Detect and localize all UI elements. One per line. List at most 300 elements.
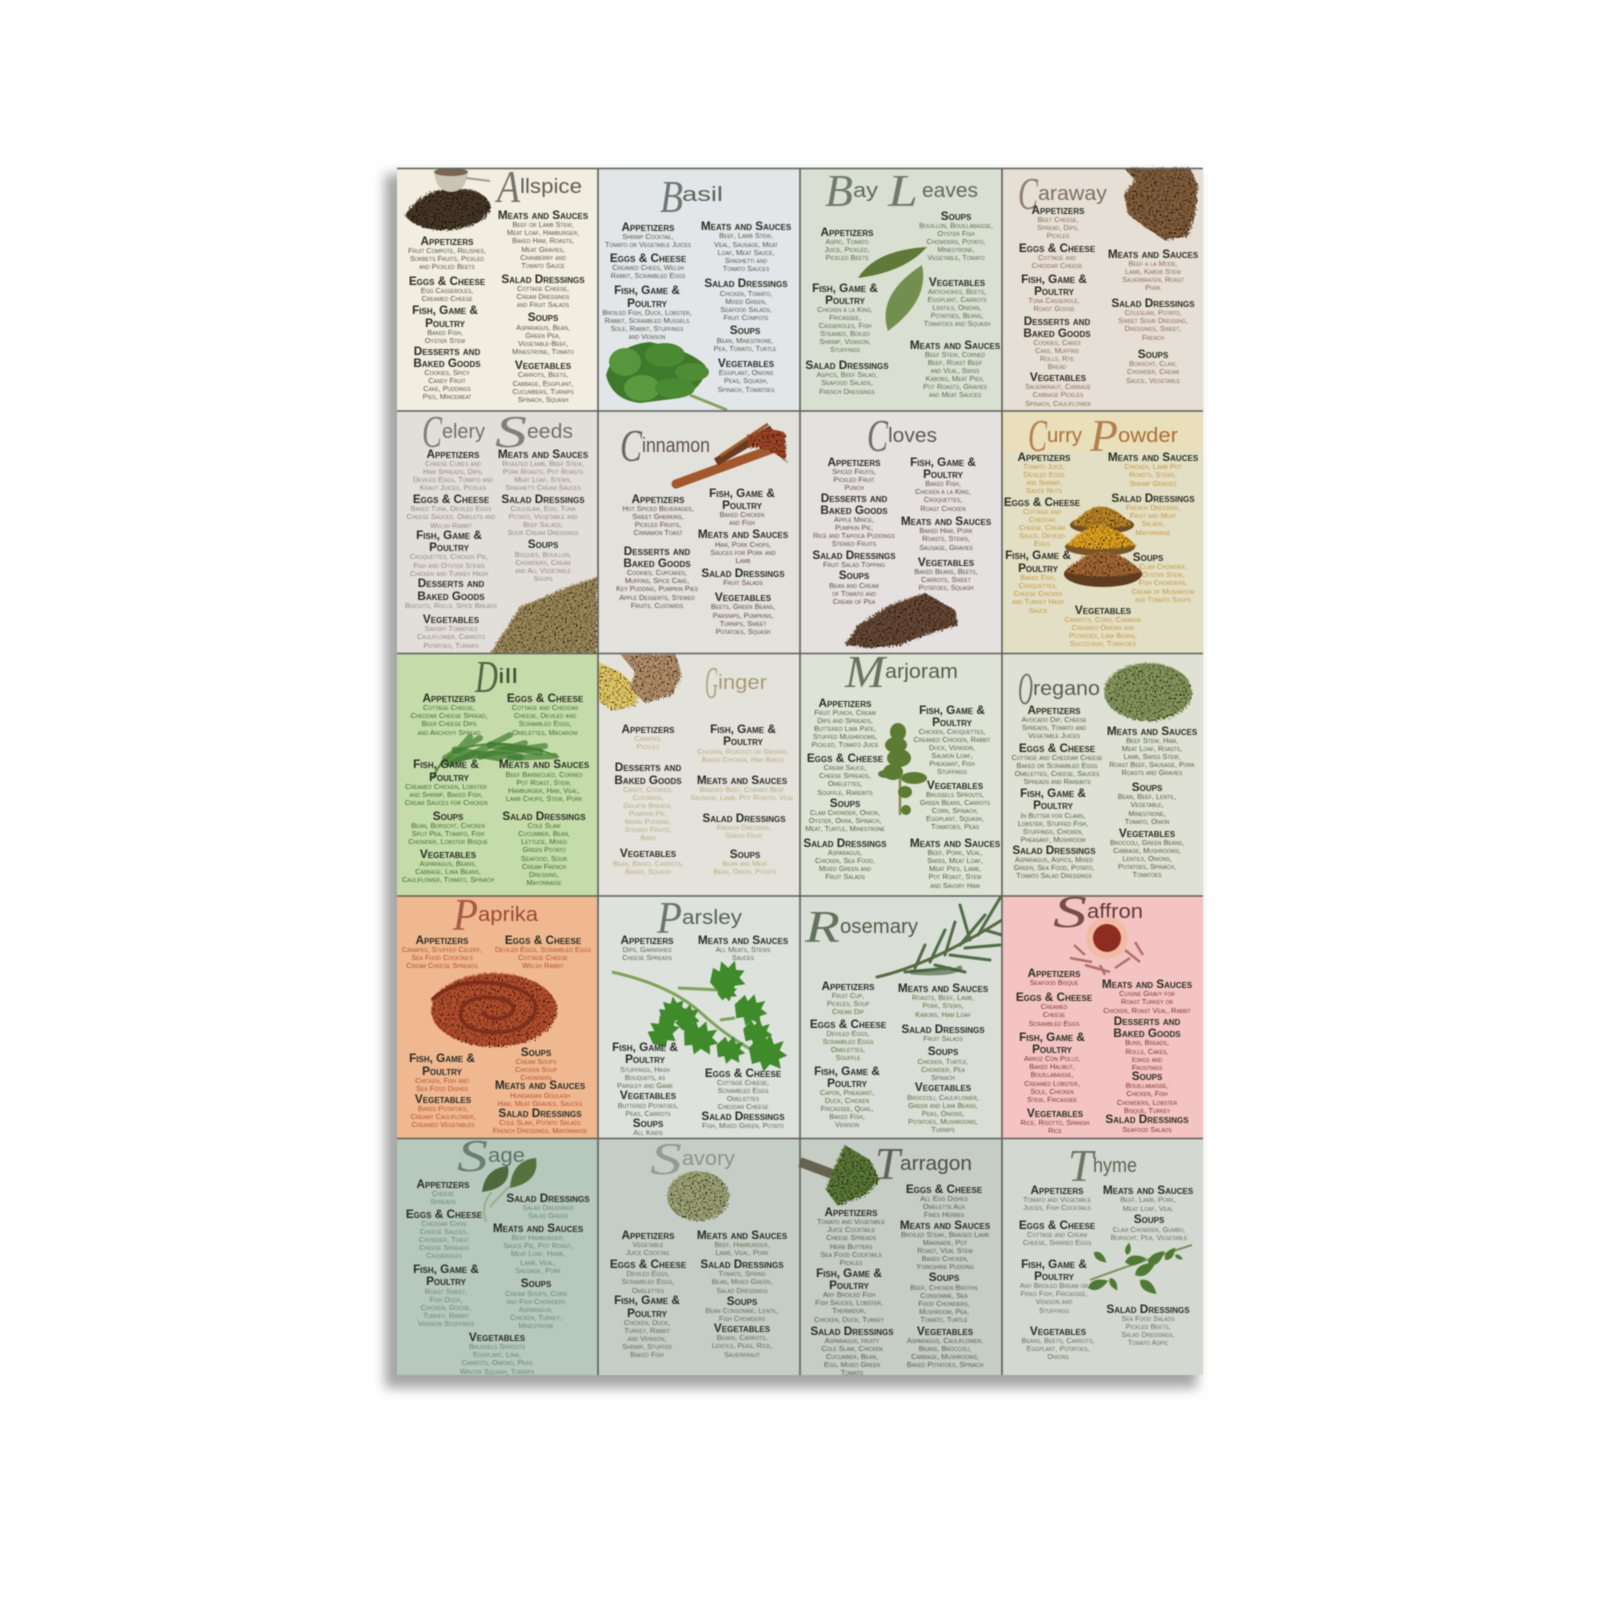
block: vegetables: Potatoes, Mushrooms, [908, 1117, 978, 1126]
block: fish game poultry: Poultry [825, 293, 866, 307]
block: eggs and cheese: Souffle, Rarebits [817, 788, 873, 797]
block: salad dressings [812, 548, 896, 569]
block: desserts: Baked Goods [1113, 1026, 1181, 1040]
block: vegetables: Peas, Squash, [724, 376, 768, 385]
block: salad dressings [704, 276, 788, 322]
block: fish game poultry: Venison and [1036, 1297, 1073, 1306]
block: desserts: Baked Goods [1023, 326, 1091, 340]
block: fish game poultry: and Fish [729, 518, 755, 527]
title: paprika: P [452, 889, 478, 940]
panel: celery seeds [397, 406, 598, 653]
block: salad dressings: Cole Slaw [528, 821, 561, 830]
block: appetizers: Canapes, Stuffed Celery, [402, 945, 482, 954]
block: eggs and cheese: Creamed Cheese [421, 294, 473, 303]
block: salad dressings: Salad Green [528, 1211, 568, 1220]
icon: bay leaves [858, 247, 927, 331]
block: soups: Bean, Onion, Potato [714, 867, 777, 876]
block: meats and sauces: Meats and Sauces [498, 447, 589, 461]
block: vegetables [1110, 826, 1184, 879]
block: appetizers: Cottage Cheese, [423, 703, 475, 712]
block: salad dressings: Seafood Salads, [720, 305, 772, 314]
block: soups: Chicken, Fish [1126, 1089, 1168, 1098]
block: meats and sauces: Meats and Sauces [1108, 247, 1199, 261]
block: vegetables: Beets, Green Beans, [711, 602, 775, 611]
block: appetizers [402, 933, 482, 970]
block: fish game poultry: Fish, Game & [1005, 548, 1071, 562]
block: fish game poultry: Fish and Oyster Stews [413, 561, 485, 570]
block: vegetables: Green Beans, Carrots [920, 798, 991, 807]
block: vegetables: Cabbage Pickles [1033, 390, 1084, 399]
block: desserts: Desserts and [615, 760, 681, 774]
block: salad dressings [493, 1106, 588, 1135]
block: fish game poultry: Poultry [827, 1076, 868, 1090]
block: soups: Oyster Stew, [1142, 570, 1184, 579]
block: meats and sauces [1108, 450, 1199, 488]
block: appetizers: Cream Dip [832, 1007, 865, 1016]
block: fish game poultry: Fish, Game & [1019, 1030, 1085, 1044]
block: appetizers: Appetizers [621, 933, 674, 947]
block: meats and sauces [498, 208, 589, 270]
block: meats and sauces: Meats and Sauces [898, 981, 989, 995]
panel: curry powder [1002, 410, 1203, 653]
block: salad dressings [506, 1191, 590, 1220]
block: eggs and cheese: Eggs & Cheese [406, 1207, 483, 1221]
block: desserts: Desserts and [414, 344, 480, 358]
block: fish game poultry: Fish, Game & [416, 528, 482, 542]
title: thyme [1068, 1140, 1137, 1191]
block: eggs and cheese: Welsh Rabbit [522, 961, 564, 970]
block: appetizers: Sorbets Fruits, Pickled [410, 254, 484, 263]
block: meats and sauces: Beef Stew, Corned [925, 350, 986, 359]
block: vegetables: Baked, Squash [625, 867, 671, 876]
block: appetizers: Beet Cheese, [1037, 215, 1079, 224]
block: fish game poultry: and Venison [629, 332, 666, 341]
block: eggs and cheese: Eggs & Cheese [807, 751, 884, 765]
block: appetizers: Cream Cheese Spreads [406, 961, 478, 970]
block: soups [910, 1270, 978, 1324]
block: appetizers: Appetizers [423, 691, 476, 705]
block: fish game poultry: Poultry [627, 296, 668, 310]
block: soups: Fish Chowders, [1139, 578, 1187, 587]
block: meats and sauces: Beef a la Mode, [1128, 259, 1178, 268]
block: soups [1118, 780, 1176, 826]
title: savory [650, 1133, 735, 1184]
block: salad dressings: Sea Food Salads [1122, 1314, 1175, 1323]
block: appetizers [1023, 1183, 1092, 1212]
block: salad dressings: Cottage Cheese, [517, 284, 569, 293]
block: vegetables: Tomatoes and Squash [924, 319, 991, 328]
block: fish game poultry: Pheasant, Fish [929, 759, 975, 768]
block: eggs and cheese: Cottage and [1038, 253, 1076, 262]
block: salad dressings: Salad Dressings [716, 1286, 768, 1295]
block: vegetables: Cauliflower, Tomato, Spinach [402, 875, 494, 884]
block: appetizers: Dips and Spreads, [817, 716, 873, 725]
block: desserts: Cookies, Spicy [424, 368, 470, 377]
block: eggs and cheese: Cheese [1043, 1010, 1066, 1019]
block: salad dressings: Asparagus, Aspics, Mixed [1015, 855, 1093, 864]
block: soups [515, 537, 572, 583]
block: vegetables: Vegetables [1027, 1106, 1084, 1120]
block: vegetables [1022, 1324, 1094, 1361]
icon: cloves [845, 593, 958, 648]
block: desserts [405, 576, 498, 610]
block: desserts: Candy, Cookies, [623, 785, 673, 794]
block: vegetables: Vegetables [718, 356, 775, 370]
block: appetizers: Tomato Juice, [1023, 462, 1065, 471]
block: fish game poultry: Fish, Game & [812, 281, 878, 295]
block: eggs and cheese: Cheese Sauces, Omelets and [407, 512, 496, 521]
block: eggs and cheese: Scrambled Eggs [1029, 1019, 1080, 1028]
block: meats and sauces: Sausage, Gravies [919, 543, 973, 552]
block: vegetables: Eggplant, Onions [719, 368, 774, 377]
block: vegetables: Vegetables [927, 778, 984, 792]
block: fish game poultry: Fish, Game & [413, 757, 479, 771]
block: eggs and cheese: Cottage and Cream [1027, 1230, 1087, 1239]
block: fish game poultry: Stuffings [937, 767, 968, 776]
block: desserts [614, 760, 682, 842]
block: appetizers: Appetizers [427, 447, 480, 461]
block: desserts: Pies, Mincemeat [423, 392, 471, 401]
panel: allspice [397, 161, 598, 411]
title: ginger: G [705, 657, 718, 708]
block: eggs and cheese [1019, 1218, 1096, 1247]
block: fish game poultry: Fish, Game & [614, 283, 680, 297]
title: rosemary: osemary [840, 916, 918, 938]
block: fish game poultry: Stuffings [1039, 1306, 1070, 1315]
title: ginger: inger [718, 672, 767, 694]
block: meats and sauces: Chicken, Roast Veal, Rabbit [1103, 1006, 1191, 1015]
block: fish game poultry [910, 455, 976, 513]
block: fish game poultry: Salmon Loaf, [931, 751, 973, 760]
block: fish game poultry: Venison [835, 1120, 859, 1129]
block: soups: Soups [727, 1294, 758, 1308]
block: vegetables: Vegetables [423, 612, 480, 626]
block: salad dressings: Lettuce, Mixed [521, 837, 567, 846]
block: eggs and cheese: Chowder, Toast [419, 1235, 469, 1244]
block: salad dressings [901, 1022, 985, 1043]
block: meats and sauces: Meats and Sauces [1108, 450, 1199, 464]
block: salad dressings: Mixed Green and [819, 864, 871, 873]
block: vegetables [924, 275, 991, 328]
block: vegetables: Savory Tomatoes [425, 624, 478, 633]
block: salad dressings: Cucumber, Bean, [826, 1352, 878, 1361]
block: soups: Soups [528, 310, 559, 324]
block: appetizers: Pickled Beets [825, 253, 869, 262]
block: salad dressings: Green Fruit [725, 831, 763, 840]
block: salad dressings: Salad Dressings [805, 358, 889, 372]
title: sage: age [488, 1145, 525, 1167]
panel: paprika [397, 889, 598, 1138]
block: fish game poultry: and Venison, [628, 1334, 666, 1343]
block: soups: Soups [633, 1116, 664, 1130]
block: salad dressings: Tomato Aspic [1128, 1338, 1169, 1347]
block: fish game poultry [914, 703, 990, 776]
block: appetizers: Tomato and Vegetable [817, 1217, 886, 1226]
block: meats and sauces: Meats and Sauces [697, 1228, 788, 1242]
block: vegetables: Baked Potatoes, Spinach [907, 1360, 984, 1369]
block: meats and sauces [900, 1218, 991, 1271]
block: desserts: Frostings [1132, 1063, 1163, 1072]
block: salad dressings: Salad Dressings, [1121, 1330, 1175, 1339]
block: appetizers: Vegetable [633, 1240, 664, 1249]
block: salad dressings: Salad Dressings [803, 836, 887, 850]
block: soups: Chowder, Pea [921, 1065, 966, 1074]
block: salad dressings: Mayonnaise [527, 878, 562, 887]
block: appetizers: Spreads [430, 1197, 456, 1206]
block: vegetables [402, 847, 494, 884]
icon: basil leaves [606, 342, 727, 410]
block: eggs and cheese: Cheese Spreads [419, 1243, 470, 1252]
block: vegetables: Vegetables [714, 1321, 771, 1335]
block: appetizers: Pickled, Tomato Juice [811, 740, 879, 749]
block: fish game poultry [409, 1051, 475, 1093]
title: celery seeds: C [422, 406, 443, 457]
block: fish game poultry: Fish, Game & [1021, 272, 1087, 286]
block: vegetables: Rice [1048, 1126, 1062, 1135]
block: soups: Fish Chowders [719, 1314, 766, 1323]
block: meats and sauces: Spaghetti Cream Sauces [505, 483, 581, 492]
block: salad dressings: Salad Dressings [1106, 1302, 1190, 1316]
icon: celery seed pile [490, 577, 597, 653]
panel: basil [598, 168, 800, 411]
block: soups: Minestrone, Tomato [512, 347, 574, 356]
block: eggs and cheese: Deviled Eggs, [626, 1269, 670, 1278]
block: desserts: Fruits, Custards [631, 601, 684, 610]
block: fish game poultry [814, 1064, 880, 1129]
block: meats and sauces [499, 757, 590, 803]
title: oregano [1018, 663, 1100, 714]
block: appetizers: Hot Spiced Beverages, [622, 504, 694, 513]
block: appetizers: Beer Cheese Dips [421, 719, 477, 728]
title: cinnamon: C [620, 420, 643, 471]
block: soups: Chowders, Cream [515, 558, 571, 567]
block: eggs and cheese [705, 1066, 782, 1111]
block: vegetables: Onions [1047, 1352, 1069, 1361]
block: eggs and cheese [1019, 241, 1096, 270]
block: desserts: Bread [1048, 362, 1067, 371]
block: meats and sauces: Kabobs, Ham Loaf [915, 1010, 971, 1019]
block: vegetables: Parsnips, Pumpkins, [713, 611, 773, 620]
block: fish game poultry: Chicken, Duck, Turkey [814, 1315, 885, 1324]
block: soups [633, 1116, 664, 1137]
block: soups: Chowders [520, 1073, 552, 1082]
block: meats and sauces [1102, 977, 1193, 1015]
block: meats and sauces: Meat Loaf, Veal [1123, 1204, 1173, 1213]
block: soups: Chowders, Potato, [927, 237, 985, 246]
block: meats and sauces [498, 447, 589, 492]
block: fish game poultry: Poultry [422, 1064, 463, 1078]
block: vegetables [907, 1080, 979, 1134]
block: fish game poultry: Stuffings, Chicken, [1023, 827, 1083, 836]
block: appetizers: Cheese Spreads [622, 953, 673, 962]
block: soups [919, 209, 993, 262]
block: vegetables: Succotash, Tomatoes [1070, 639, 1136, 648]
block: meats and sauces [898, 981, 989, 1019]
block: fish game poultry: Poultry [1033, 798, 1074, 812]
block: appetizers: Appetizers [822, 979, 875, 993]
block: fish game poultry: and Turkey Hash [1012, 597, 1064, 606]
block: vegetables: Vegetables [715, 590, 772, 604]
block: appetizers: Aspic, Tomato [826, 237, 869, 246]
block: appetizers: and Pickled Beets [419, 262, 475, 271]
block: appetizers [1018, 450, 1071, 495]
block: soups: Bean, Beef, Lentil, [1118, 792, 1176, 801]
block: meats and sauces: Beef Hamburger, [512, 1233, 564, 1242]
block: vegetables: Creamed Onions and [1072, 623, 1135, 632]
title: celery seeds: S [495, 406, 527, 457]
block: salad dressings: Fruit Salad Topping [823, 560, 885, 569]
block: fish game poultry: Rabbit, Scrambled Mussels [605, 316, 690, 325]
block: eggs and cheese [495, 933, 592, 970]
block: appetizers: Herb Butters [830, 1242, 873, 1251]
block: meats and sauces: Meats and Sauces [697, 773, 788, 787]
block: desserts: Baked Goods [623, 556, 691, 570]
block: soups: Soups [1132, 1069, 1163, 1083]
block: fish game poultry: Poultry [1034, 1269, 1075, 1283]
block: eggs and cheese: Cottage Cheese, [717, 1078, 769, 1087]
block: fish game poultry: Broiled Fish, Duck, Lobster, [602, 308, 692, 317]
icon: paprika spiral [431, 973, 557, 1047]
block: appetizers: Dips, Garnishes [623, 945, 672, 954]
block: appetizers: and Shrimp, [1026, 478, 1062, 487]
block: vegetables: Vegetables [1030, 1324, 1087, 1338]
block: eggs and cheese: Sauce, Deviled [1019, 531, 1065, 540]
panel: sage [397, 1130, 598, 1376]
block: eggs and cheese: Cheddar Cheese [718, 1102, 769, 1111]
block: fish game poultry: Poultry [723, 734, 764, 748]
block: desserts: Desserts and [1114, 1014, 1180, 1028]
block: eggs and cheese [906, 1182, 983, 1219]
block: fish game poultry: Poultry [627, 1306, 668, 1320]
block: soups: Sauce, Vegetable [1126, 376, 1181, 385]
block: desserts [1023, 314, 1091, 371]
title: sage [457, 1130, 525, 1181]
block: meats and sauces: Meats and Sauces [901, 514, 992, 528]
block: meats and sauces: Meat Loaf, Hamburger, [507, 228, 579, 237]
block: meats and sauces [910, 836, 1001, 890]
block: fish game poultry: Poultry [429, 770, 470, 784]
block: salad dressings: Salad Dressings [1111, 491, 1195, 505]
block: fish game poultry: Fish, Game & [919, 703, 985, 717]
block: fish game poultry: In Butter for Clams, [1021, 811, 1085, 820]
block: fish game poultry: Baked Fish [630, 1350, 664, 1359]
block: vegetables: Lentils, Onions, [1122, 854, 1172, 863]
block: salad dressings: Beef Salads, [523, 520, 563, 529]
block: soups: Asparagus, [519, 1305, 553, 1314]
block: fish game poultry: Turkey, Rabbit [624, 1326, 670, 1335]
block: soups: Pea, Tomato, Turtle [714, 344, 777, 353]
block: fish game poultry: Casseroles, Fish [819, 321, 872, 330]
block: salad dressings: Dressing, [529, 870, 559, 879]
title: marjoram: M [844, 646, 888, 697]
block: eggs and cheese: Cream Sauce, [824, 763, 866, 772]
block: vegetables: Eggplant, Potatoes, [1027, 1344, 1089, 1353]
block: desserts: Cake, Muffins [1035, 346, 1079, 355]
block: soups [805, 796, 886, 833]
block: meats and sauces: Sauces [732, 953, 755, 962]
block: fish game poultry: Fish, Game & [413, 1262, 479, 1276]
block: fish game poultry: Turkey, Rabbit [423, 1311, 469, 1320]
block: desserts: Pumpkin Pie, [629, 809, 667, 818]
block: fish game poultry: Poultry [829, 1278, 870, 1292]
block: meats and sauces: Lamb, Veal, Pork [715, 1248, 769, 1257]
block: salad dressings [1106, 1302, 1190, 1347]
block: meats and sauces: Beef, Hamburger, [714, 1240, 770, 1249]
title: tarragon: arragon [900, 1153, 972, 1175]
block: fish game poultry: Fish, Game & [612, 1040, 678, 1054]
block: eggs and cheese: Fines Herbes [924, 1210, 965, 1219]
block: salad dressings: Salad Dressings [498, 1106, 582, 1120]
block: meats and sauces [701, 219, 792, 273]
block: fish game poultry: Poultry [932, 715, 973, 729]
panel: cinnamon [598, 411, 800, 653]
block: soups: Spinach [931, 1073, 955, 1082]
block: meats and sauces: Beef, Pork, Veal, [927, 848, 983, 857]
block: eggs and cheese: Eggs & Cheese [810, 1017, 887, 1031]
block: fish game poultry: Croquettes, Chicken Pie, [410, 552, 488, 561]
block: fish game poultry: Cheese Chicken [1014, 589, 1063, 598]
block: meats and sauces [698, 933, 789, 962]
block: vegetables: Brussels Sprouts, [926, 790, 984, 799]
block: desserts: Stewed Fruits [832, 539, 877, 548]
block: fish game poultry: Sole, Rabbit, Stuffings [611, 324, 684, 333]
block: vegetables: Lentils, Peas, Rice, [712, 1341, 772, 1350]
block: meats and sauces: and Veal, Swiss [931, 366, 980, 375]
title: oregano: O [1018, 663, 1033, 714]
block: soups: Soups [521, 1276, 552, 1290]
block: soups: Cream of Pea [833, 597, 876, 606]
block: soups: Bouillon, Bouillabaisse, [919, 221, 993, 230]
block: salad dressings: Seafood, Sour [521, 854, 567, 863]
block: fish game poultry: Chicken a la King, [915, 487, 971, 496]
block: fish game poultry: Arroz Con Pollo, [1024, 1054, 1080, 1063]
block: fish game poultry: Duck, Chicken [825, 1096, 870, 1105]
title: saffron [1053, 886, 1143, 937]
title: bay leaves: L [887, 165, 918, 216]
block: vegetables [712, 1321, 772, 1359]
title: allspice: A [495, 161, 521, 212]
block: eggs and cheese: All Egg Dishes [920, 1194, 968, 1203]
block: fish game poultry: Any Broiled Fish [823, 1290, 876, 1299]
block: salad dressings: Salad Dressings [502, 809, 586, 823]
block: meats and sauces: Roasts, Stews, [1129, 470, 1177, 479]
block: eggs and cheese [409, 274, 486, 303]
block: meats and sauces: Roast Beef, Sausage, Pork [1109, 760, 1195, 769]
title: savory: avory [682, 1148, 735, 1170]
block: eggs and cheese: Scrambled Eggs, [622, 1277, 674, 1286]
block: desserts: Indian Pudding, [625, 817, 671, 826]
block: meats and sauces: Beef, Roast Beef [928, 358, 982, 367]
block: appetizers: Pickled Fruits, [635, 520, 681, 529]
block: eggs and cheese: Eggs & Cheese [906, 1182, 983, 1196]
title: saffron: S [1053, 886, 1087, 937]
block: meats and sauces: Meats and Sauces [498, 208, 589, 222]
block: desserts: Cookies, Cakes [1033, 338, 1081, 347]
block: desserts: Stewed Fruits, [625, 825, 671, 834]
block: appetizers: Canapes, [634, 734, 662, 743]
block: appetizers: Appetizers [819, 696, 872, 710]
block: meats and sauces: Sausage, Lamb, Pot Roasts, Veal [690, 793, 794, 802]
block: soups: of Tomato and [832, 589, 876, 598]
block: appetizers: Juice Cocktail [626, 1248, 670, 1257]
block: salad dressings: Cucumber, Bean, [518, 829, 570, 838]
block: fish game poultry: Baked Chicken [720, 510, 765, 519]
block: salad dressings: Sweet Sour Dressing, [1118, 316, 1188, 325]
block: meats and sauces: Lamb [736, 556, 751, 565]
block: appetizers: Appetizers [1018, 450, 1071, 464]
block: desserts: Cake, Puddings [423, 384, 471, 393]
block: meats and sauces: Pot Roast, Stew, [516, 778, 572, 787]
